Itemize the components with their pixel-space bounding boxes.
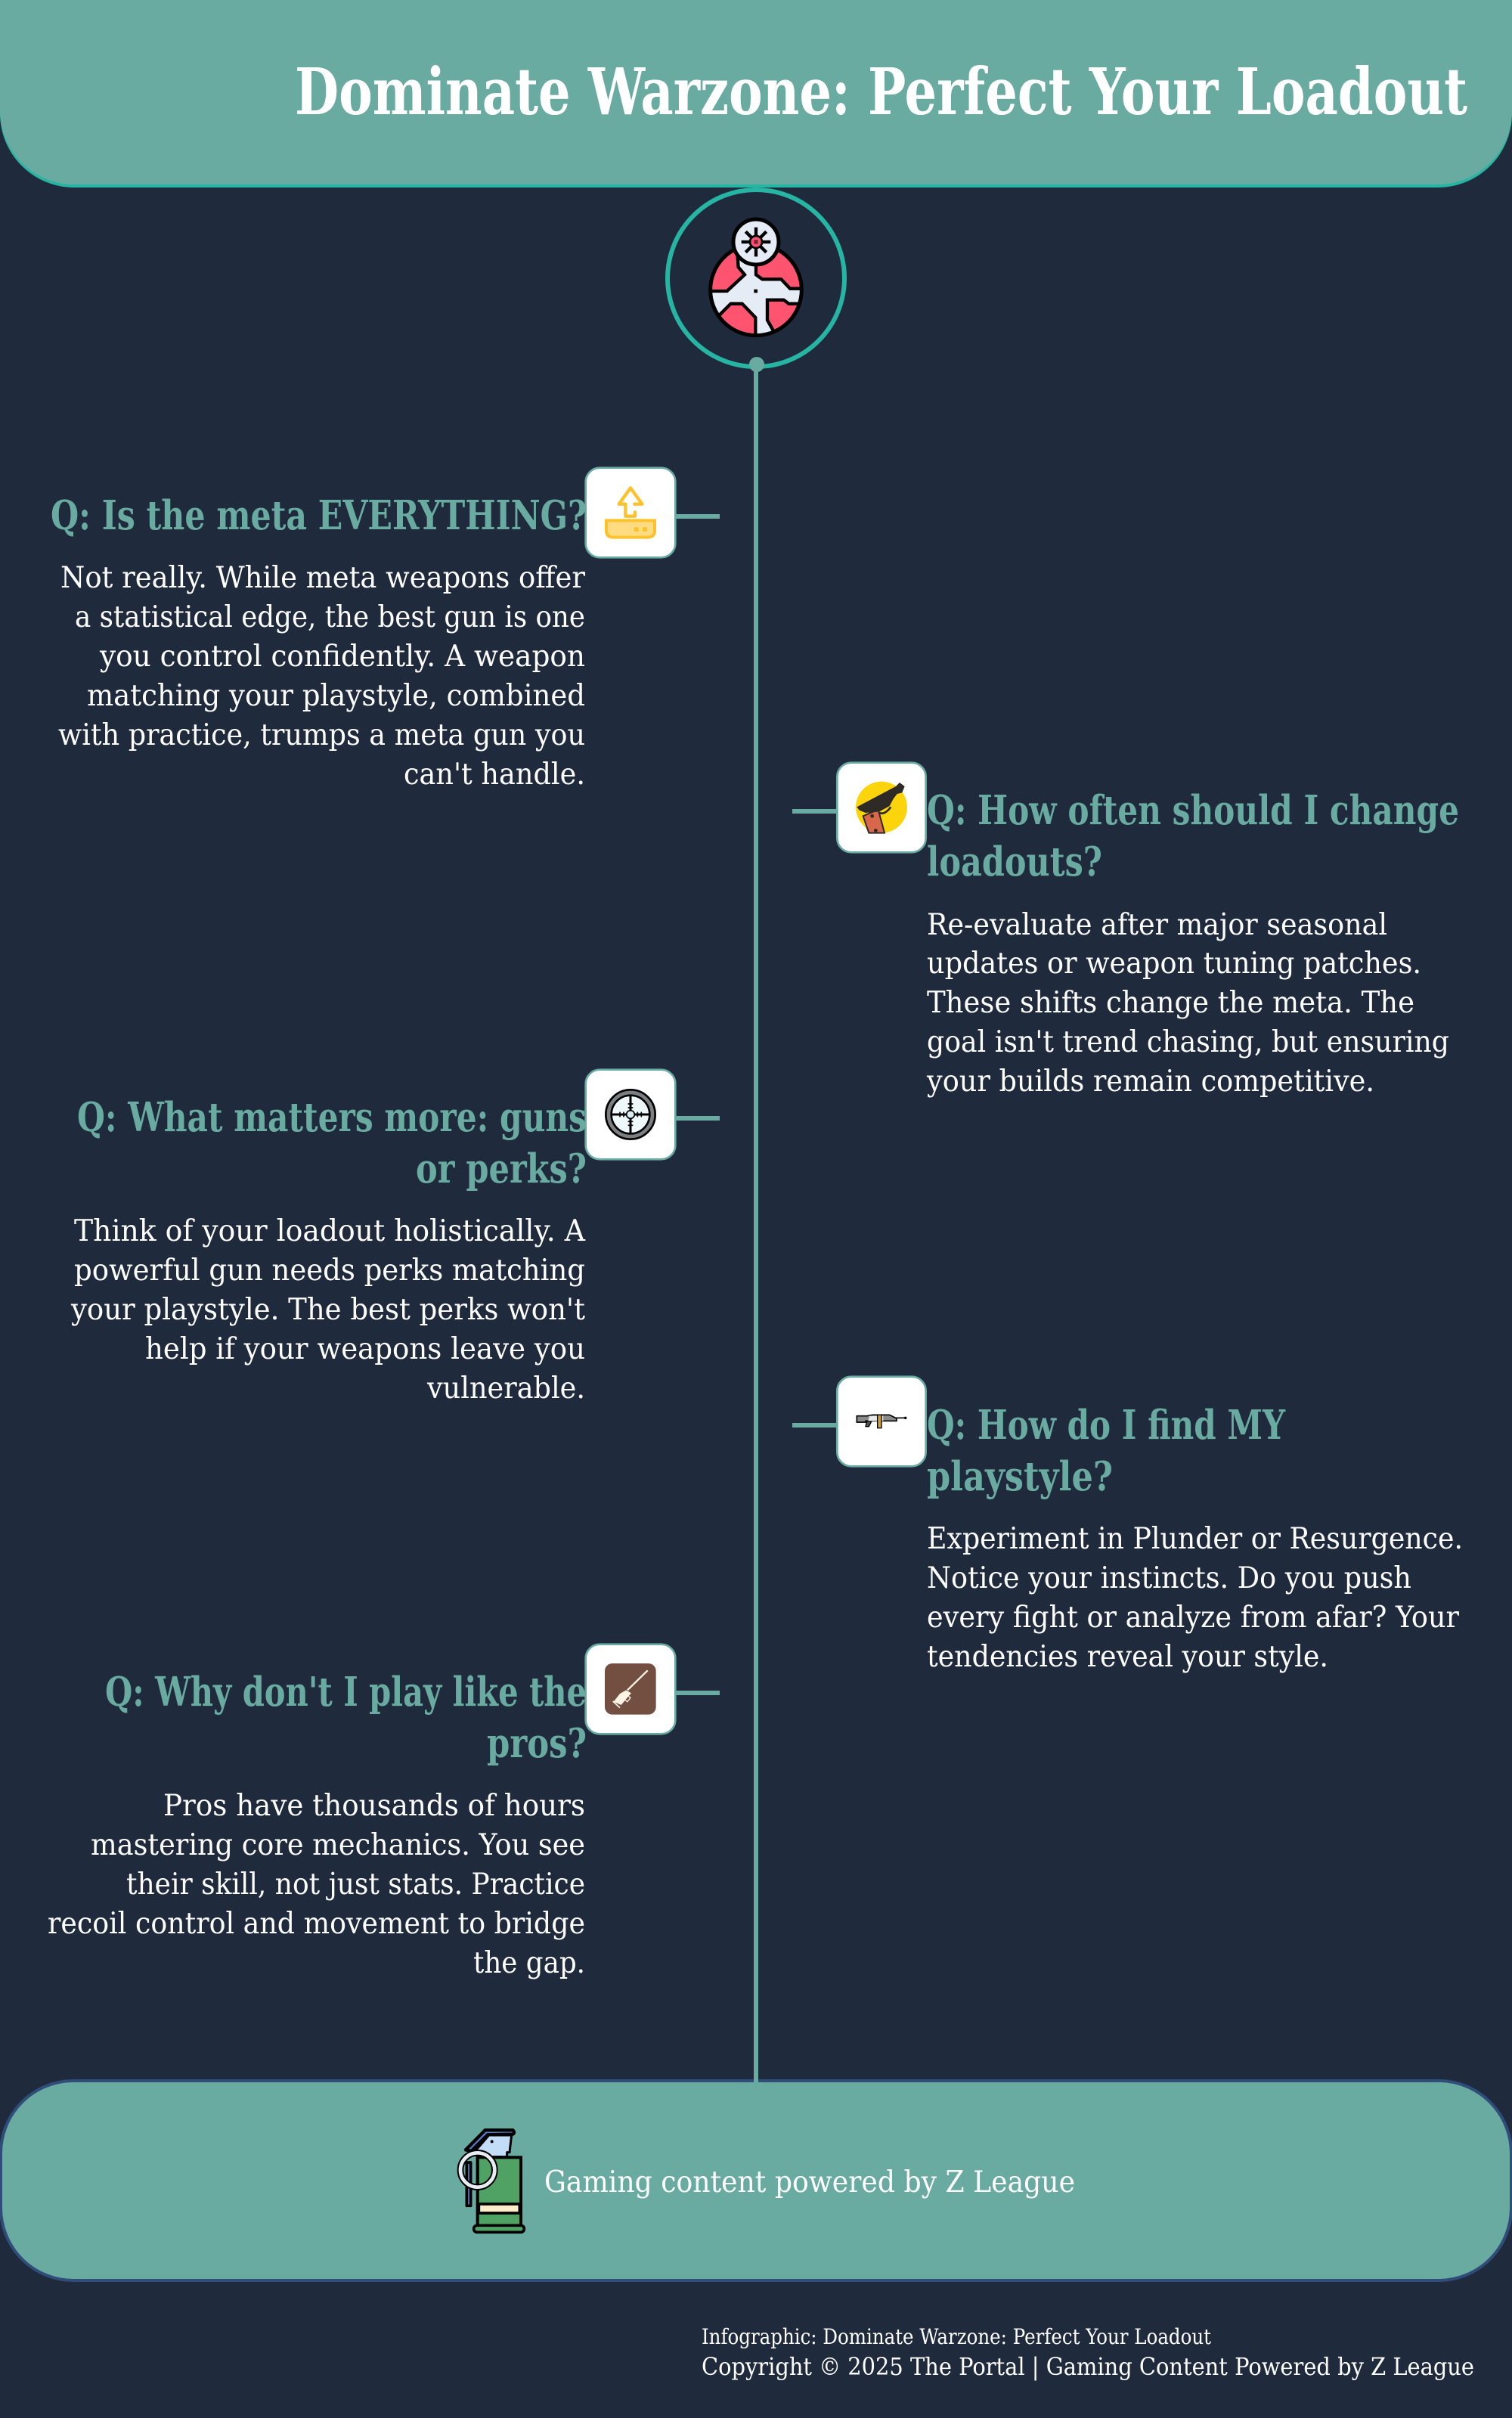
heading: Q: What matters more: guns (77, 1094, 587, 1141)
answer text: goal isn't trend chasing, but ensuring (927, 1025, 1449, 1059)
icon: shotgun on brown tile (586, 1645, 675, 1734)
answer text: Notice your instincts. Do you push (927, 1561, 1411, 1595)
central timeline line (754, 364, 758, 2082)
answer text: Re-evaluate after major seasonal (927, 907, 1387, 942)
icon: crosshair scope (586, 1070, 675, 1159)
answer text: Experiment in Plunder or Resurgence. (927, 1521, 1463, 1556)
heading: playstyle? (927, 1453, 1113, 1500)
answer text: mastering core mechanics. You see (91, 1827, 585, 1862)
heading (927, 1402, 1286, 1500)
item 3: guns or perks (70, 1070, 720, 1406)
connector (792, 1423, 837, 1428)
answer text (927, 1521, 1463, 1674)
credits (702, 2324, 1474, 2381)
icon: grenade (460, 2130, 524, 2232)
answer text: Not really. While meta weapons offer (60, 560, 585, 595)
answer text: their skill, not just stats. Practice (126, 1867, 585, 1902)
item 1: meta (51, 468, 720, 792)
heading: Q: Why don't I play like the (105, 1669, 587, 1716)
answer text: recoil control and movement to bridge (48, 1906, 585, 1941)
answer text: a statistical edge, the best gun is one (75, 600, 585, 634)
answer text: the gap. (473, 1945, 585, 1980)
answer text (58, 560, 585, 792)
item 5: pros (48, 1645, 720, 1980)
answer text: Pros have thousands of hours (163, 1788, 585, 1823)
answer text: your builds remain competitive. (926, 1064, 1374, 1099)
icon: assault rifle (837, 1377, 926, 1466)
heading (927, 787, 1459, 885)
answer text (926, 907, 1449, 1099)
answer text: every fight or analyze from afar? Your (927, 1600, 1459, 1635)
answer text: These shifts change the meta. The (927, 985, 1414, 1020)
answer text: powerful gun needs perks matching (74, 1253, 585, 1288)
icon: upload tray (586, 468, 675, 557)
answer text: can't handle. (404, 757, 585, 792)
credits: Infographic: Dominate Warzone: Perfect Your Loadout (702, 2324, 1212, 2349)
heading: loadouts? (927, 839, 1102, 885)
connector (675, 1116, 720, 1121)
answer text: with practice, trumps a meta gun you (58, 718, 585, 752)
answer text: you control confidently. A weapon (99, 639, 585, 674)
answer text: updates or weapon tuning patches. (927, 946, 1421, 981)
connector (675, 514, 720, 519)
item 4: playstyle (792, 1377, 1463, 1674)
answer text: help if your weapons leave you (145, 1331, 585, 1366)
heading: Q: How do I find MY (927, 1402, 1286, 1449)
heading: Q: Is the meta EVERYTHING? (51, 492, 587, 539)
item 2: loadout frequency (792, 763, 1459, 1099)
footer text: Gaming content powered by Z League (544, 2165, 1075, 2199)
footer banner (1, 2079, 1511, 2280)
answer text: matching your playstyle, combined (87, 678, 585, 713)
heading: pros? (487, 1720, 587, 1767)
icon: pistol (837, 763, 926, 852)
answer text (48, 1788, 585, 1980)
heading: or perks? (416, 1145, 587, 1192)
connector (792, 809, 837, 814)
answer text: your playstyle. The best perks won't (70, 1292, 585, 1327)
connector (675, 1691, 720, 1695)
answer text (70, 1214, 585, 1406)
answer text: tendencies reveal your style. (927, 1639, 1328, 1674)
answer text: Think of your loadout holistically. A (74, 1214, 585, 1248)
header banner (0, 0, 1512, 188)
heading (105, 1669, 587, 1767)
answer text: vulnerable. (426, 1371, 585, 1406)
hero icon circle (668, 190, 844, 372)
icon: globe with virus (708, 219, 807, 340)
heading (77, 1094, 587, 1192)
